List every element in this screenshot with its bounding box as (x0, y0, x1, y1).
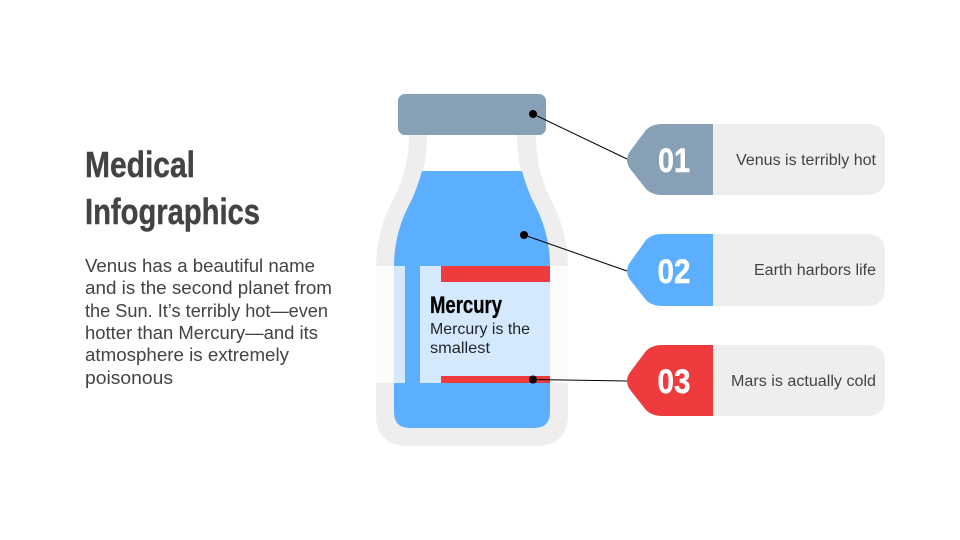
label text (430, 292, 530, 357)
text panel (713, 345, 885, 416)
number: 01 (658, 142, 690, 180)
label text: Mercury (430, 292, 503, 319)
number tag (627, 124, 713, 195)
body text: poisonous (85, 368, 173, 388)
body text: atmosphere is extremely (85, 345, 289, 365)
bottle glass (376, 135, 568, 446)
caption: Venus is terribly hot (736, 152, 877, 169)
callout 03 (627, 345, 885, 416)
title (85, 144, 260, 232)
connector 03 (529, 376, 627, 384)
text panel (713, 124, 885, 195)
body text (85, 256, 332, 388)
callout 01 (627, 124, 885, 195)
caption: Mars is actually cold (731, 373, 876, 390)
callout 02 (627, 234, 885, 306)
label band (376, 266, 568, 383)
caption: Earth harbors life (754, 262, 876, 279)
connector 02 (520, 231, 627, 271)
title: Medical (85, 144, 195, 185)
title: Infographics (85, 191, 260, 232)
connector 01 (529, 110, 627, 159)
label panel (394, 266, 550, 383)
bottle liquid (394, 171, 550, 428)
number: 03 (658, 363, 690, 401)
number: 02 (658, 253, 690, 291)
number tag (627, 345, 713, 416)
body text: and is the second planet from (85, 278, 332, 298)
body text: hotter than Mercury—and its (85, 323, 318, 343)
number tag (627, 234, 713, 306)
bottle (376, 94, 568, 446)
text panel (713, 234, 885, 306)
body text: Venus has a beautiful name (85, 256, 315, 276)
label text: smallest (430, 340, 491, 357)
body text: the Sun. It’s terribly hot—even (85, 301, 328, 321)
label text: Mercury is the (430, 321, 530, 338)
bottle cap (398, 94, 546, 135)
